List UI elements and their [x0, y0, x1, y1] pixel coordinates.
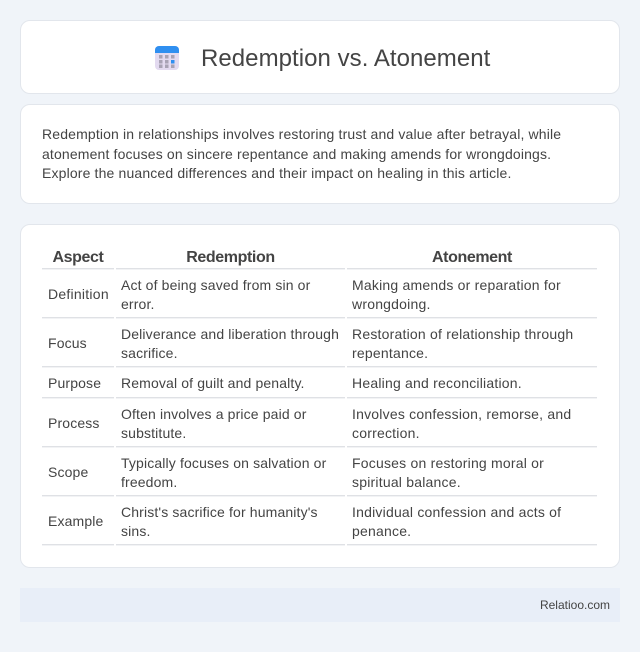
text: repentance. [352, 345, 428, 361]
text: substitute. [121, 425, 186, 441]
row: Scope: Scope [48, 464, 88, 480]
text: Restoration of relationship through [352, 326, 573, 342]
header: Aspect: Aspect [53, 249, 103, 266]
intro text: Redemption in relationships involves restoring trust and value after betrayal, while [42, 126, 561, 142]
text: Deliverance and liberation through [121, 326, 339, 342]
text: Often involves a price paid or [121, 406, 307, 422]
text: Removal of guilt and penalty. [121, 375, 305, 391]
text: sins. [121, 523, 150, 539]
text: wrongdoing. [352, 296, 431, 312]
text: Focuses on restoring moral or [352, 455, 544, 471]
text: freedom. [121, 474, 177, 490]
header: Redemption: Redemption [186, 249, 275, 266]
text: sacrifice. [121, 345, 178, 361]
title: Redemption vs. Atonement [201, 45, 490, 72]
text: correction. [352, 425, 420, 441]
row: Example: Example [48, 513, 103, 529]
row: Purpose: Purpose [48, 375, 101, 391]
intro text [42, 126, 561, 181]
icon: calendar [155, 46, 179, 70]
footer credit: Relatioo.com [540, 598, 610, 612]
text: spiritual balance. [352, 474, 461, 490]
intro text: atonement focuses on sincere repentance and making amends for wrongdoings. [42, 146, 551, 162]
footer bar [20, 588, 620, 622]
text: Act of being saved from sin or [121, 277, 310, 293]
title card [20, 20, 620, 94]
row: Definition: Definition [48, 286, 109, 302]
text: error. [121, 296, 155, 312]
text: Involves confession, remorse, and [352, 406, 571, 422]
text: Healing and reconciliation. [352, 375, 522, 391]
text: Making amends or reparation for [352, 277, 561, 293]
text: Christ's sacrifice for humanity's [121, 504, 318, 520]
table card [20, 224, 620, 568]
intro text: Explore the nuanced differences and their impact on healing in this article. [42, 165, 512, 181]
intro card [20, 104, 620, 204]
text: penance. [352, 523, 411, 539]
text: Individual confession and acts of [352, 504, 561, 520]
text: Typically focuses on salvation or [121, 455, 326, 471]
header: Atonement: Atonement [432, 249, 512, 266]
row: Process: Process [48, 415, 100, 431]
row: Focus: Focus [48, 335, 87, 351]
